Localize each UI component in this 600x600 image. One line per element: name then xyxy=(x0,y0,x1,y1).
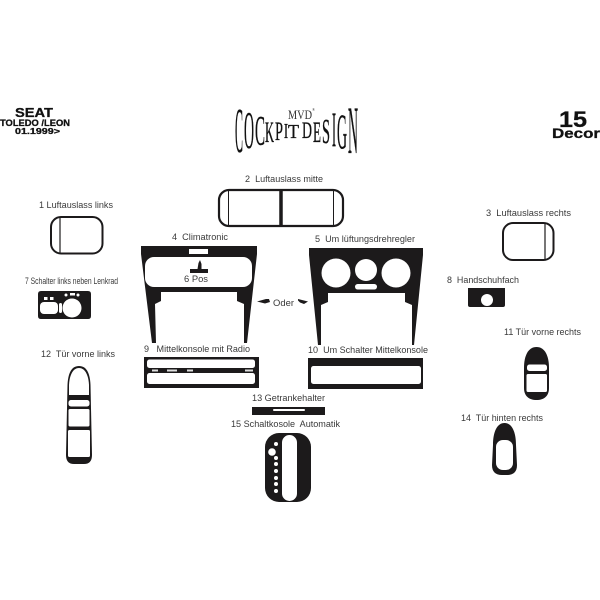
part 12: Tür vorne links: 12 Tür vorne links xyxy=(41,349,115,359)
title: 15 Decor: 15 xyxy=(559,107,587,132)
logo: Cockpit Design: K xyxy=(265,116,274,149)
arrows: Oder xyxy=(257,298,308,308)
part 9: Mittelkonsole mit Radio: 9 Mittelkonsole mit Radio xyxy=(144,344,250,354)
title: vehicle model: 01.1999> xyxy=(15,126,60,136)
logo: Cockpit Design: C xyxy=(255,109,265,155)
logo: Cockpit Design: MVD xyxy=(288,107,312,122)
part 9: Mittelkonsole mit Radio xyxy=(144,344,259,388)
part 12: Tür vorne links xyxy=(41,349,115,464)
part 2: Luftauslass mitte xyxy=(219,174,343,226)
part 4: Climatronic: 4 Climatronic xyxy=(172,232,229,242)
text: N xyxy=(348,92,358,168)
part 14: Tür hinten rechts: 14 Tür hinten rechts xyxy=(461,413,543,423)
part 4: Climatronic xyxy=(141,232,257,343)
logo: Cockpit Design: S xyxy=(322,112,330,151)
part 1: Luftauslass links: 1 Luftauslass links xyxy=(39,200,113,210)
logo: Cockpit Design: E xyxy=(313,116,321,149)
part 14: Tür hinten rechts xyxy=(461,413,543,475)
part 11: Tür vorne rechts xyxy=(504,327,581,400)
part 10: Um Schalter Mittelkonsole: 10 Um Schalter Mittelkonsole xyxy=(308,345,428,355)
title: vehicle model xyxy=(0,105,70,136)
part 5: Um lüftungsdrehregler: 5 Um lüftungsdrehregler xyxy=(315,234,415,244)
part 7: Schalter links neben Lenkrad: 7 Schalter links neben Lenkrad xyxy=(25,276,118,286)
logo: Cockpit Design: O xyxy=(244,102,254,160)
logo: Cockpit Design: C xyxy=(235,95,243,166)
part 15: Schaltkosole Automatik xyxy=(231,419,341,502)
part 2: Luftauslass mitte: 2 Luftauslass mitte xyxy=(245,174,323,184)
part 13: Getrankehalter xyxy=(252,393,325,415)
title: 15 Decor xyxy=(552,107,600,141)
part 13: Getrankehalter: 13 Getrankehalter xyxy=(252,393,325,403)
part 8: Handschuhfach xyxy=(447,275,519,307)
title: vehicle model: SEAT xyxy=(15,105,53,120)
part 3: Luftauslass rechts: 3 Luftauslass rechts xyxy=(486,208,572,218)
logo: Cockpit Design: I xyxy=(332,101,336,157)
part 15: Schaltkosole Automatik: 15 Schaltkosole Automatik xyxy=(231,419,341,429)
part 6: Pos: 6 Pos xyxy=(184,274,209,284)
logo: Cockpit Design: ® xyxy=(312,107,315,112)
title: 15 Decor: Decor xyxy=(552,126,600,141)
part 7: Schalter links neben Lenkrad xyxy=(25,276,118,319)
logo: Cockpit Design: G xyxy=(337,103,347,159)
arrows: Oder: Oder xyxy=(273,298,294,308)
part 11: Tür vorne rechts: 11 Tür vorne rechts xyxy=(504,327,581,337)
logo: Cockpit Design: T xyxy=(288,121,299,143)
title: vehicle model: TOLEDO /LEON xyxy=(0,118,70,129)
part 1: Luftauslass links xyxy=(39,200,113,254)
logo: Cockpit Design: P xyxy=(275,117,283,146)
logo: Cockpit Design: D xyxy=(302,118,312,143)
part 3: Luftauslass rechts xyxy=(486,208,572,260)
part 6: Pos xyxy=(184,260,209,284)
logo: Cockpit Design xyxy=(235,92,358,168)
part 8: Handschuhfach: 8 Handschuhfach xyxy=(447,275,519,285)
part 10: Um Schalter Mittelkonsole xyxy=(308,345,428,389)
part 5: Um lüftungsdrehregler xyxy=(309,234,423,345)
logo: Cockpit Design: I xyxy=(284,119,288,143)
